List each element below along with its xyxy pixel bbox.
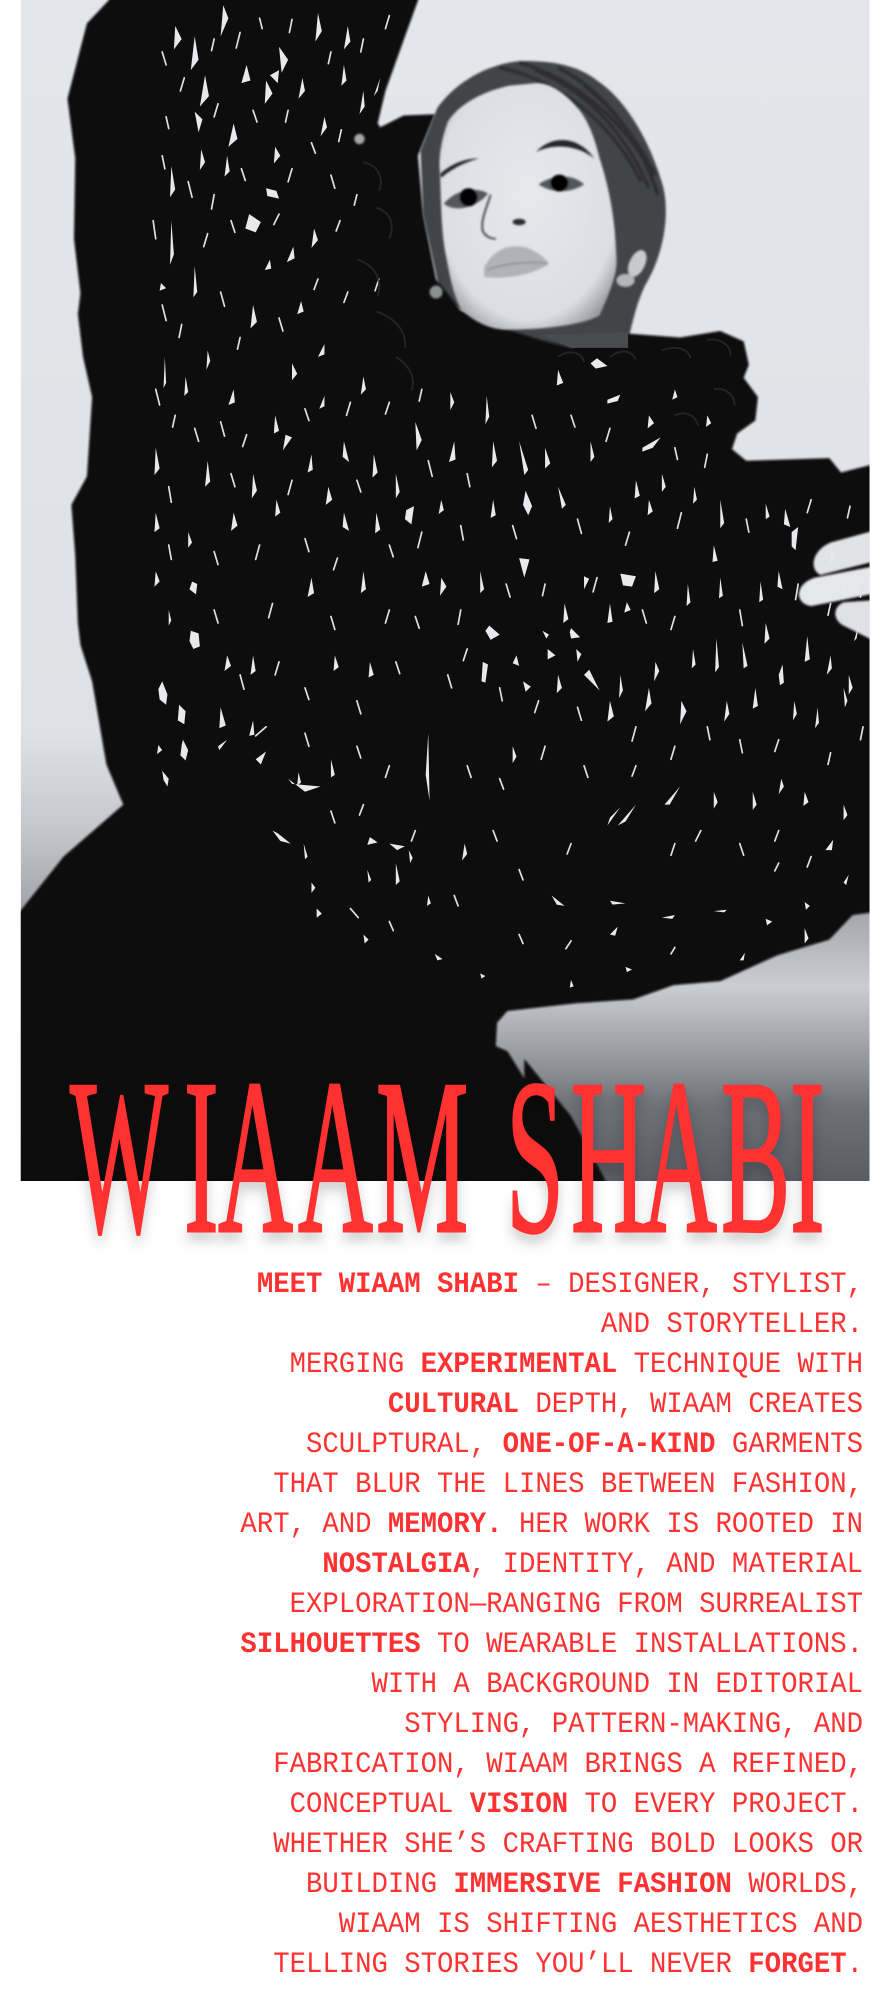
earring — [354, 134, 650, 299]
knit thin highlight strokes — [153, 16, 863, 954]
photo background wall — [21, 0, 870, 1181]
lips — [484, 246, 549, 278]
title: WIAAM SHABI: WIAAM SHABI — [70, 1035, 825, 1280]
eyes — [444, 190, 488, 208]
hand fingers — [797, 530, 870, 640]
black knit garment and shadow — [13, 0, 883, 1194]
hood — [420, 61, 666, 353]
biography text block: MEET WIAAM SHABI – DESIGNER, STYLIST, AND STORYTELLER. MERGING EXPERIMENTAL TECHNIQUE WITH CULTURAL DEPTH, WIAAM CREATES SCULPTURAL, ONE-OF-A-KIND GARMENTS THAT BLUR THE LINES BETWEEN FASHION, ART, AND MEMORY. HER WORK IS ROOTED IN NOSTALGIA, IDENTITY, AND MATERIAL EXPLORATION—RANGING FROM SURREALIST SILHOUETTES TO WEARABLE INSTALLATIONS. WITH A BACKGROUND IN EDITORIAL STYLING, PATTERN-MAKING, AND FABRICATION, WIAAM BRINGS A REFINED, CONCEPTUAL VISION TO EVERY PROJECT. WHETHER SHE’S CRAFTING BOLD LOOKS OR BUILDING IMMERSIVE FASHION WORLDS, WIAAM IS SHIFTING AESTHETICS AND TELLING STORIES YOU’LL NEVER FORGET. — [240, 1268, 863, 1982]
nose — [482, 195, 496, 239]
knit highlights — [154, 5, 859, 988]
knit texture at collar and sleeve edge — [357, 162, 735, 426]
photo: portrait of the designer in a chunky black knit — [20, 0, 870, 1181]
neck — [559, 332, 628, 348]
brows — [440, 140, 594, 178]
face — [440, 83, 628, 348]
